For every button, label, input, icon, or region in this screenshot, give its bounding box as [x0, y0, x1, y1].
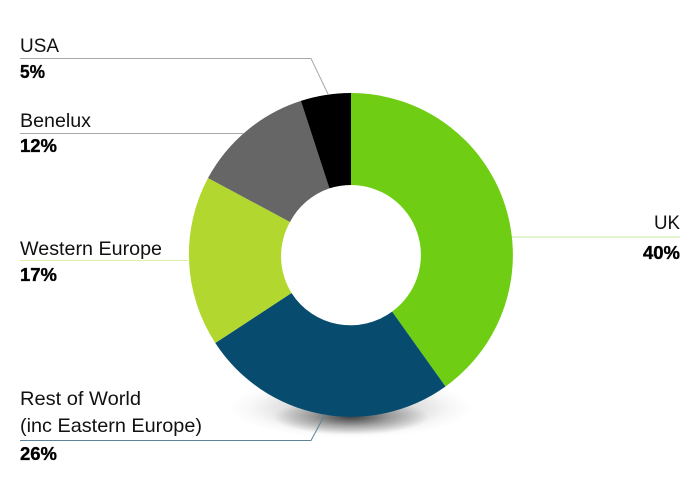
donut chart	[189, 93, 513, 417]
value: USA: 5%	[20, 61, 45, 82]
leader line: UK	[512, 236, 680, 238]
label: Western Europe: Western Europe	[20, 238, 162, 260]
leader line: Rest of World	[20, 414, 325, 440]
value: Western Europe: 17%	[20, 264, 57, 285]
slice: Rest of World 26%	[215, 293, 446, 417]
leader line: Benelux	[20, 132, 244, 134]
slice: USA 5%	[301, 93, 351, 188]
label: UK: UK	[654, 212, 680, 234]
label: inc Eastern Europe: (inc Eastern Europe)	[20, 415, 202, 437]
value: Rest of World: 26%	[20, 443, 57, 464]
pie drop shadow	[229, 378, 473, 438]
leader line: USA	[20, 58, 328, 94]
leader line: Western Europe	[20, 260, 190, 262]
label: Benelux: Benelux	[20, 110, 91, 132]
label: Rest of World: Rest of World	[20, 388, 141, 410]
value: UK: 40%	[643, 242, 680, 263]
slice: Western Europe 17%	[189, 178, 292, 343]
slice: Benelux 12%	[208, 101, 329, 222]
label: USA: USA	[20, 35, 59, 57]
slice: UK 40%	[351, 93, 513, 386]
value: Benelux: 12%	[20, 135, 57, 156]
